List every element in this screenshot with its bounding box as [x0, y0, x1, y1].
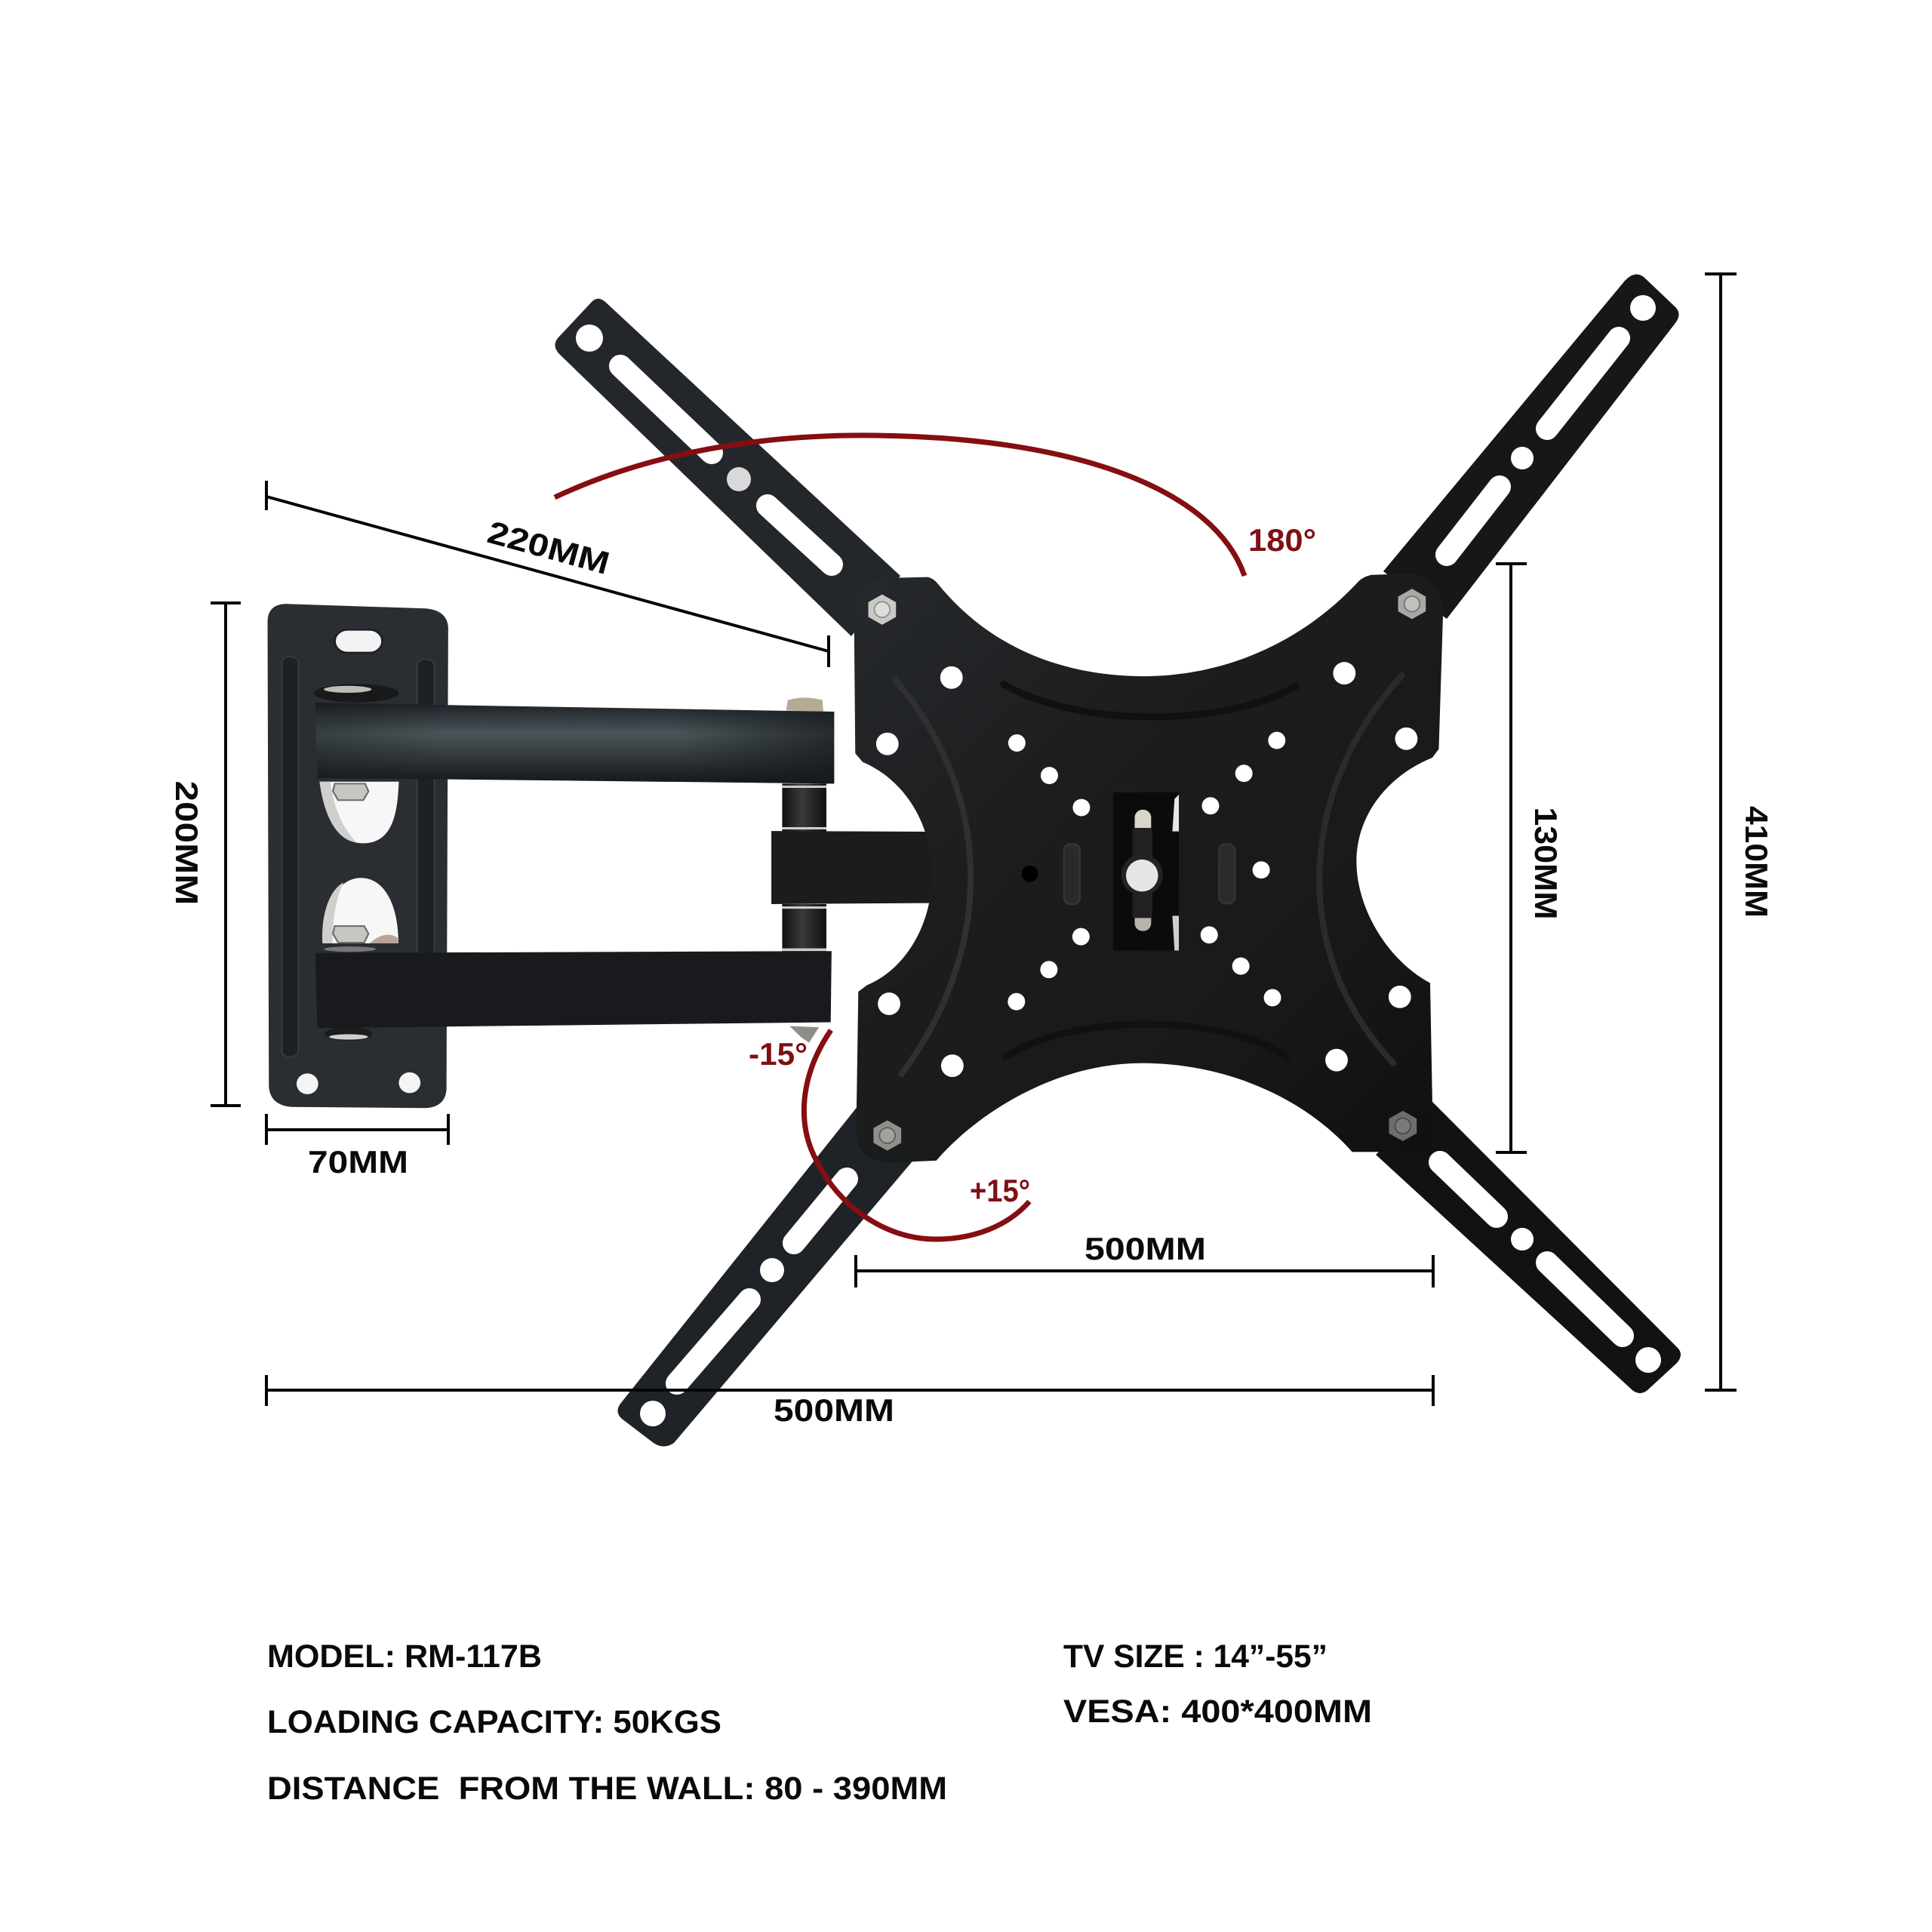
central VESA plate: [854, 574, 1443, 1163]
dimension: 410MM: 410MM: [1739, 806, 1774, 918]
bottom-right mounting arm: [1376, 1102, 1681, 1393]
pivot pins: [782, 783, 826, 953]
dimension: 200MM: [169, 603, 241, 1106]
bolt bottom-left: [873, 1120, 901, 1151]
bolt bottom-right: [1389, 1111, 1417, 1141]
lower swing arm: [315, 951, 832, 1043]
dimension: 200MM: 200MM: [169, 780, 205, 906]
centre black hole: [1022, 866, 1038, 882]
dimension: lower 500MM: [266, 1375, 1433, 1428]
specs: right column: VESA: 400*400MM: [1063, 1694, 1372, 1730]
specs: right column: [1063, 1638, 1372, 1730]
upper swing arm: [315, 697, 834, 783]
specs: left column: [267, 1638, 947, 1807]
bolt top-right: [1398, 589, 1426, 619]
dimension: upper 500MM: 500MM: [1084, 1231, 1206, 1266]
dimension: 130MM: [1496, 564, 1564, 1152]
dimension: 220MM: [266, 481, 829, 667]
label: plus 15 degrees: +15°: [970, 1173, 1030, 1208]
specs: left column: MODEL: RM-117B: [267, 1638, 542, 1675]
bolt top-left: [869, 595, 896, 625]
dimension: 130MM: 130MM: [1528, 808, 1564, 919]
centre tilt bracket: [1113, 792, 1179, 950]
wall plate and swing arms: [268, 604, 946, 1108]
mounting holes: [876, 662, 1417, 1077]
dimension: 410MM: [1705, 274, 1774, 1390]
embossed ribs: [895, 675, 1402, 1074]
specs: right column: TV SIZE : 14”-55”: [1063, 1638, 1327, 1675]
dimension: 220MM: 220MM: [484, 514, 614, 581]
specs: left column: LOADING CAPACITY: 50KGS: [267, 1704, 721, 1740]
dimension: 70MM: 70MM: [308, 1144, 408, 1180]
pivot block: [771, 831, 946, 904]
label: minus 15 degrees: -15°: [749, 1036, 808, 1072]
dimension: lower 500MM: 500MM: [774, 1392, 894, 1428]
dimension: upper 500MM: [856, 1231, 1433, 1287]
specs: left column: DISTANCE FROM THE WALL: 80 - 390MM: [267, 1770, 947, 1807]
tilt arc: [804, 1030, 1029, 1239]
top-right mounting arm: [1383, 274, 1679, 619]
label: 180 degrees: 180°: [1248, 522, 1316, 558]
bottom-left mounting arm: [617, 1079, 912, 1446]
top-left mounting arm: [555, 299, 900, 636]
wall plate: [268, 604, 448, 1108]
dimension: 70MM: [266, 1114, 448, 1180]
180 degree swivel arc: [555, 435, 1244, 576]
